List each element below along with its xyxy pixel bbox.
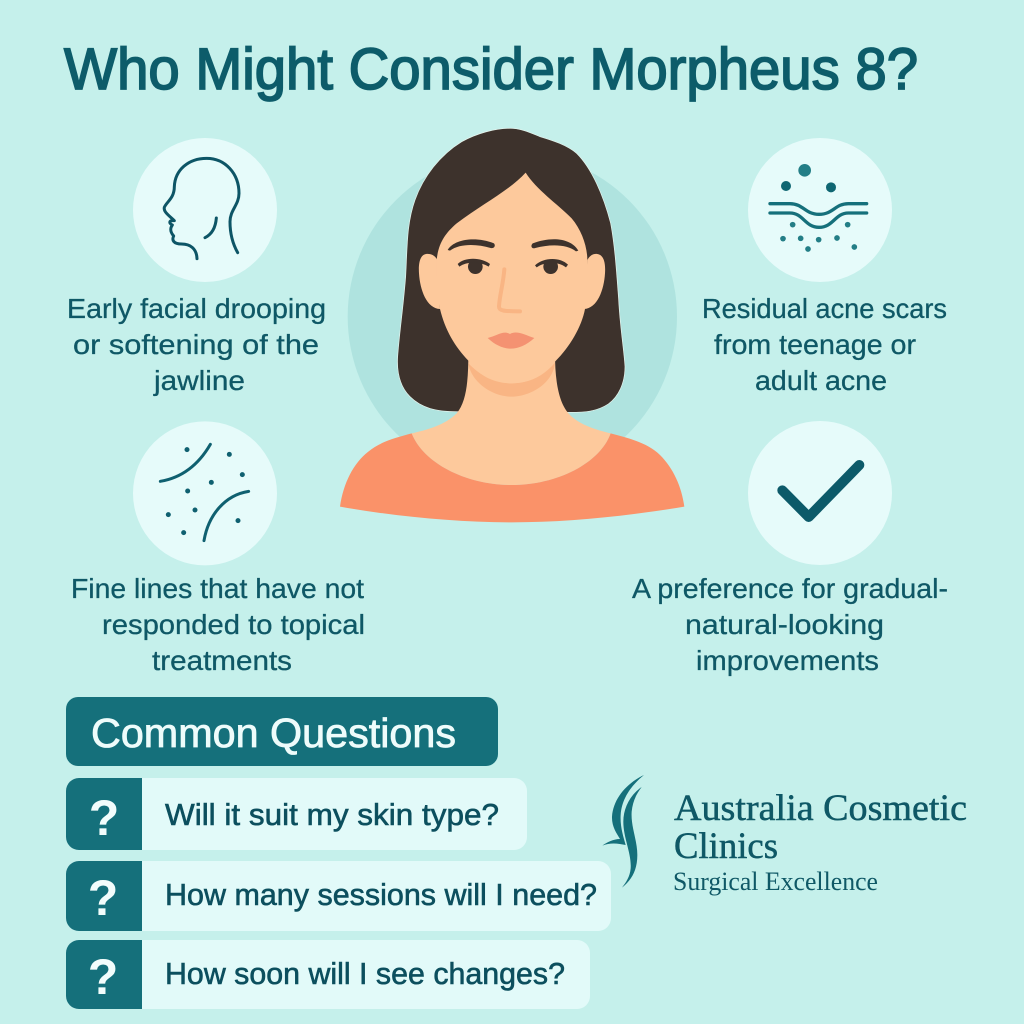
icon: head profile <box>133 138 277 282</box>
text: adult acne <box>755 365 887 396</box>
logo name: Australia Cosmetic <box>674 788 967 829</box>
question row 2: How many sessions will I need? <box>165 877 597 912</box>
text: Residual acne scars <box>702 293 947 324</box>
question row 1: ? <box>89 790 119 846</box>
logo tagline: Surgical Excellence <box>673 867 878 896</box>
panel: gradual improvements <box>632 421 948 676</box>
icon: check mark <box>748 421 892 565</box>
lips <box>488 333 534 349</box>
text: Fine lines that have not <box>71 573 364 604</box>
heading: common questions <box>66 697 498 766</box>
title: Who Might Consider Morpheus 8? <box>64 37 918 102</box>
eyes <box>458 259 568 274</box>
icon: logo swoosh <box>602 775 644 888</box>
logo: Australia Cosmetic Clinics: Clinics <box>674 826 778 867</box>
text <box>67 293 326 396</box>
neck <box>412 353 611 485</box>
panel: acne scars <box>702 138 947 396</box>
text: improvements <box>696 645 879 676</box>
shirt <box>340 433 684 522</box>
hair <box>397 128 625 412</box>
icon: skin layers <box>748 138 892 282</box>
question row 2: ? <box>88 870 118 926</box>
heading: common questions: Common Questions <box>91 710 456 756</box>
question row 1 <box>66 778 527 850</box>
text <box>71 573 365 676</box>
text <box>632 573 948 676</box>
icon: fine lines and dots <box>133 421 277 565</box>
text: from teenage or <box>714 329 916 360</box>
nose <box>499 269 520 311</box>
panel: fine lines <box>71 421 365 676</box>
text: natural-looking <box>685 609 884 640</box>
backdrop circle <box>348 152 677 481</box>
neck shadow <box>468 363 555 397</box>
question row 1: Will it suit my skin type? <box>165 797 499 832</box>
question row 2 <box>66 861 611 931</box>
face <box>437 173 587 383</box>
text: A preference for gradual- <box>632 573 948 604</box>
question row 3: How soon will I see changes? <box>165 956 565 991</box>
text: responded to topical <box>102 609 365 640</box>
eyebrows <box>448 239 495 251</box>
panel: facial drooping <box>67 138 326 396</box>
portrait illustration <box>340 128 684 522</box>
text <box>702 293 947 396</box>
logo: Australia Cosmetic Clinics <box>602 775 967 896</box>
question row 3 <box>66 940 590 1009</box>
ears <box>419 254 440 309</box>
text: Early facial drooping <box>67 293 326 324</box>
text: treatments <box>152 645 292 676</box>
text: jawline <box>153 365 245 396</box>
text: or softening of the <box>73 329 319 360</box>
question row 3: ? <box>88 949 118 1005</box>
